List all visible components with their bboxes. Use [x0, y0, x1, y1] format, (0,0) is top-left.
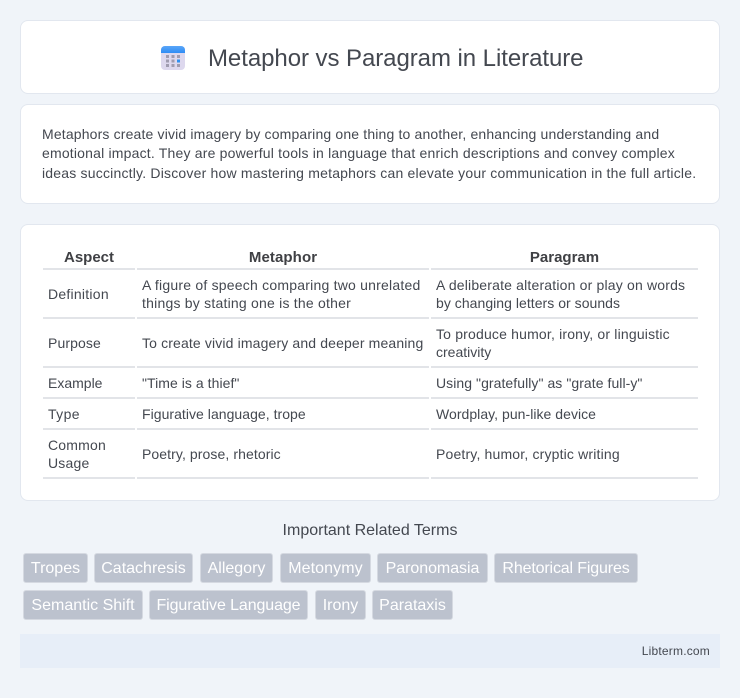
tag row 1: Tropes	[31, 560, 80, 577]
tag row 1	[23, 553, 638, 583]
row: example: "Time is a thief"	[142, 375, 239, 391]
row: purpose	[48, 326, 670, 360]
intro paragraph: emotional impact. They are powerful tools in language that enrich descriptions and convey complex	[42, 145, 675, 161]
intro paragraph: ideas succinctly. Discover how mastering metaphors can elevate your communication in the full article.	[42, 165, 696, 181]
tag row 2	[23, 590, 453, 620]
tag row 2: Semantic Shift	[31, 597, 135, 614]
table header	[64, 249, 599, 266]
intro text panel	[20, 104, 720, 204]
row: purpose: Purpose	[48, 335, 101, 351]
row: type: Wordplay, pun-like device	[436, 406, 596, 422]
row: common usage: Poetry, prose, rhetoric	[142, 446, 281, 462]
related terms heading: Important Related Terms	[283, 522, 457, 539]
tag row 2: Figurative Language	[156, 597, 300, 614]
intro paragraph: Metaphors create vivid imagery by comparing one thing to another, enhancing understanding and	[42, 126, 659, 142]
table header: Metaphor	[249, 249, 317, 266]
tag row 1: Rhetorical Figures	[502, 560, 630, 577]
title: Metaphor vs Paragram in Literature	[208, 45, 583, 72]
row: common usage: Usage	[48, 455, 89, 471]
row: type: Type	[48, 406, 80, 422]
tag row 1: Allegory	[208, 560, 265, 577]
row: definition: by changing letters or sounds	[436, 295, 620, 311]
row: purpose: To create vivid imagery and deeper meaning	[142, 335, 423, 351]
tag row 1: Paronomasia	[386, 560, 479, 577]
row: definition: A figure of speech comparing two unrelated	[142, 277, 421, 293]
table header: Aspect	[64, 249, 114, 266]
row: common usage: Poetry, humor, cryptic writing	[436, 446, 620, 462]
row: purpose: creativity	[436, 344, 491, 360]
related term tags	[23, 553, 638, 620]
row: example: Example	[48, 375, 102, 391]
icon: calendar	[161, 46, 185, 70]
tag row 2: Parataxis	[379, 597, 446, 614]
footer bar	[20, 634, 720, 668]
row: definition: things by stating one is the other	[142, 295, 351, 311]
header card	[20, 20, 720, 94]
intro paragraph	[42, 126, 696, 181]
row: example	[48, 375, 642, 391]
comparison table panel	[20, 224, 720, 501]
row: purpose: To produce humor, irony, or linguistic	[436, 326, 670, 342]
table header: Paragram	[530, 249, 599, 266]
tag row 2: Irony	[323, 597, 358, 614]
row: type: Figurative language, trope	[142, 406, 306, 422]
row: common usage	[48, 437, 620, 471]
row: common usage: Common	[48, 437, 106, 453]
tag row 1: Catachresis	[101, 560, 186, 577]
row: definition: A deliberate alteration or play on words	[436, 277, 685, 293]
row: definition: Definition	[48, 286, 109, 302]
row: type	[48, 406, 596, 422]
row: example: Using "gratefully" as "grate full-y"	[436, 375, 642, 391]
tag row 1: Metonymy	[288, 560, 363, 577]
row: definition	[48, 277, 685, 311]
footer source: Libterm.com	[642, 644, 710, 658]
